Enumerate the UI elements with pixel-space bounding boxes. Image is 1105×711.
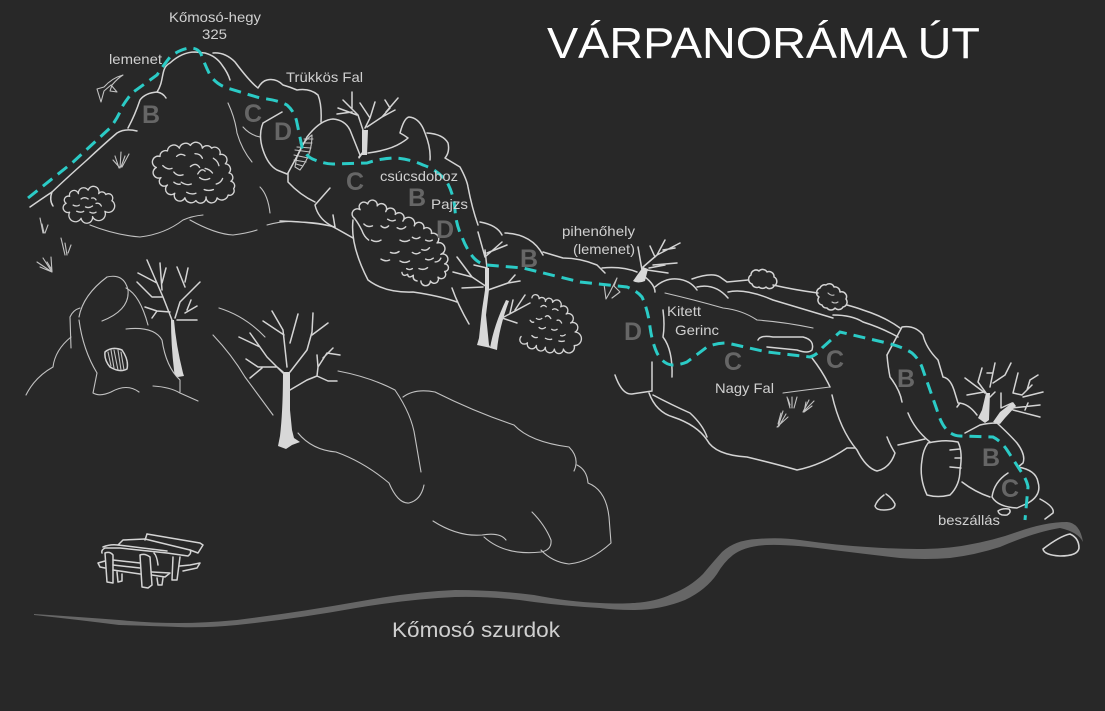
rock outlines: left crag with cave xyxy=(26,276,198,401)
rock outlines: Csúcsdoboz and Pajzs xyxy=(280,117,637,324)
stream: Kőmosó gorge xyxy=(34,522,1083,627)
place labels: Nagy Fal xyxy=(715,380,774,396)
tree: large foreground xyxy=(239,311,340,449)
icon: cave opening xyxy=(105,348,127,371)
route grade letters: C xyxy=(1001,475,1019,503)
route grade letters: C xyxy=(346,168,364,196)
place labels: Kőmosó-hegy xyxy=(169,9,261,25)
tree: rest stop xyxy=(633,240,680,282)
rock outlines: right buttress and start xyxy=(887,327,1053,519)
tree: below Pajzs xyxy=(453,232,530,350)
route grade letters: C xyxy=(244,100,262,128)
place labels: Gerinc xyxy=(675,322,719,338)
route grade letters: D xyxy=(274,118,292,146)
route grade letters: D xyxy=(624,318,642,346)
bush: small left xyxy=(63,186,115,223)
bush: second small on ridge xyxy=(817,284,847,310)
bush: below Csúcsdoboz xyxy=(352,200,448,286)
grass tufts xyxy=(37,152,814,427)
rock outlines: Kőmosó peak xyxy=(30,52,353,238)
bush: beside lower tree xyxy=(520,295,581,354)
route grade letters: B xyxy=(142,101,160,129)
bench xyxy=(98,534,203,588)
tree: between Trükkös Fal and Csúcsdoboz xyxy=(337,92,398,159)
place labels: lemenet xyxy=(109,51,162,67)
tree: left crag xyxy=(137,260,200,377)
icon: descent arrow near lemenet xyxy=(97,75,123,102)
route grade letters: B xyxy=(520,245,538,273)
place labels: Kitett xyxy=(667,303,701,319)
hatched patch: Trükkös Fal crux xyxy=(294,135,313,170)
icon: descent arrow near rest stop xyxy=(604,278,620,299)
route grade letters: B xyxy=(982,444,1000,472)
label: Kőmosó gorge: Kőmosó szurdok xyxy=(392,619,561,642)
place labels: 325 xyxy=(202,26,227,42)
bush: under Kőmosó peak xyxy=(152,142,235,203)
place labels: (lemenet) xyxy=(573,241,635,257)
boulders by the stream xyxy=(875,494,1079,556)
place labels: csúcsdoboz xyxy=(380,168,458,184)
place labels: beszállás xyxy=(938,512,1000,528)
route grade letters: C xyxy=(724,348,742,376)
place labels: Pajzs xyxy=(431,196,468,212)
route grade letters xyxy=(142,100,1019,503)
place labels: pihenőhely xyxy=(562,223,635,239)
tree: right side xyxy=(965,363,1043,424)
route grade letters: B xyxy=(897,365,915,393)
place labels xyxy=(109,9,1000,528)
route grade letters: B xyxy=(408,184,426,212)
climbing route xyxy=(28,48,1028,520)
route grade letters: D xyxy=(436,216,454,244)
rock outlines: Kitett Gerinc and Nagy Fal xyxy=(615,275,930,471)
title: VÁRPANORÁMA ÚT xyxy=(547,19,980,68)
place labels: Trükkös Fal xyxy=(286,69,363,85)
bush: small on ridge xyxy=(749,269,777,289)
route grade letters: C xyxy=(826,346,844,374)
rock outlines: foreground cliff xyxy=(213,308,611,564)
